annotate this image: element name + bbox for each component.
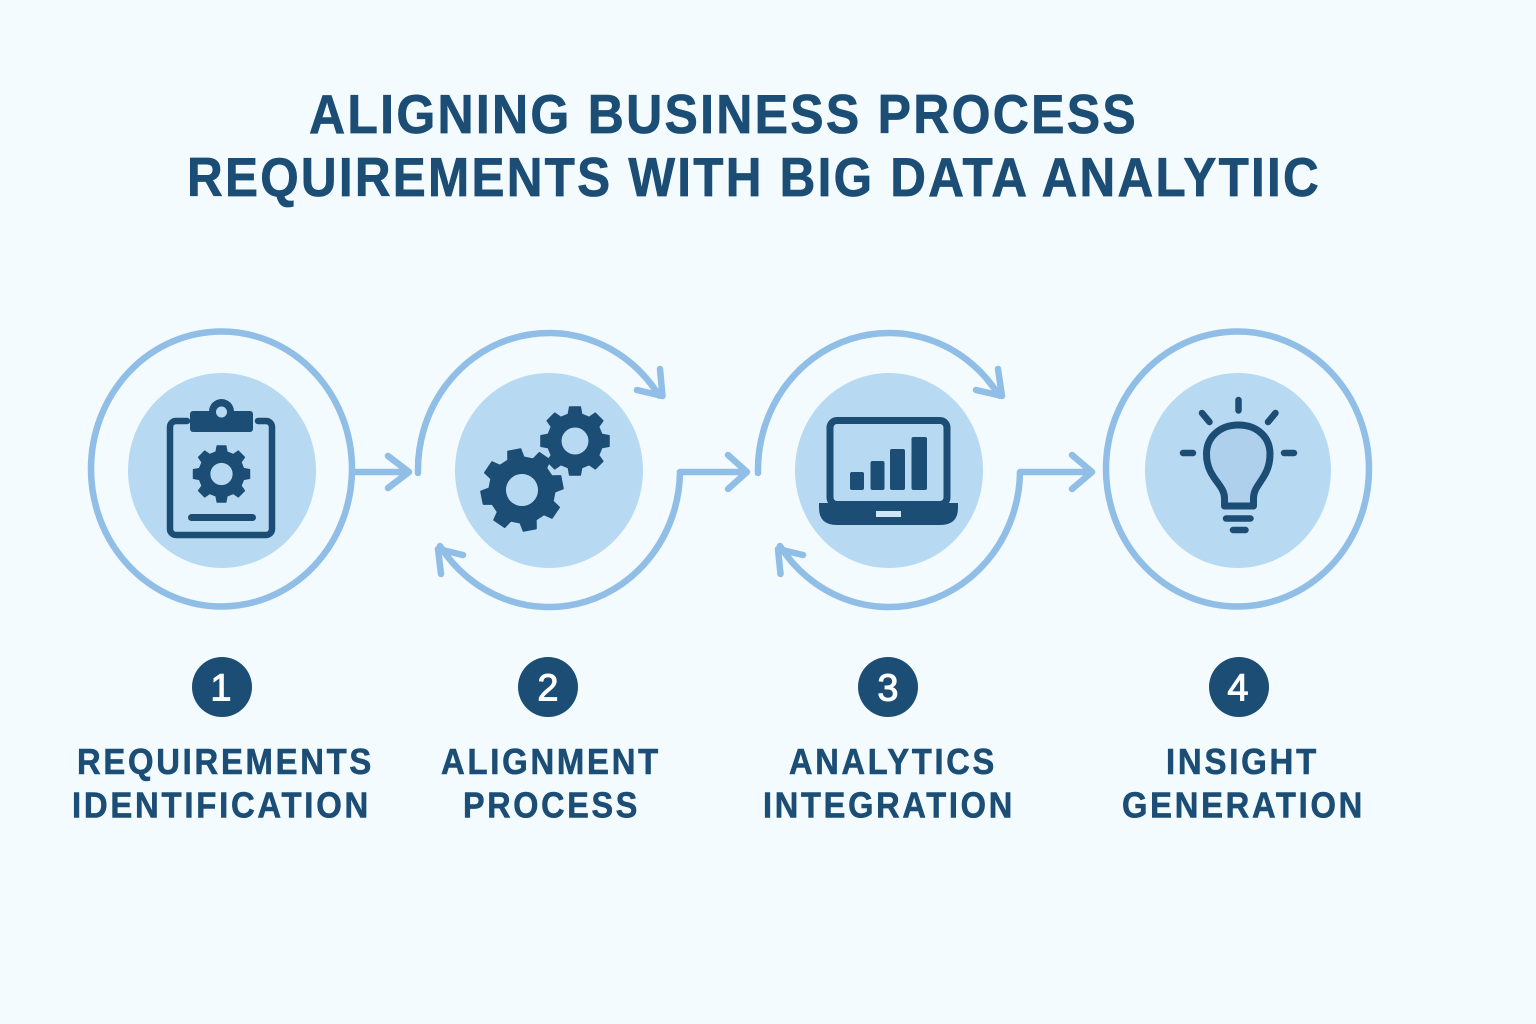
panel: step 1 requirements identification [91,332,352,606]
badge: number 2: 2 [537,668,559,710]
badge: number 1: 1 [210,668,232,710]
label: requirements identification [72,741,374,826]
arrow: cycle bottom and connector 2 [438,455,747,607]
inner disc 2 [455,373,643,568]
label: alignment process: ALIGNMENT [441,741,661,782]
icon: gears [475,407,609,537]
title: ALIGNING BUSINESS PROCESS [309,83,1138,145]
label: alignment process [441,741,661,826]
label: alignment process: PROCESS [463,784,640,826]
badge: number 4: 4 [1227,668,1249,710]
inner disc 3 [795,373,983,568]
arrow: step 1 to step 2 [356,456,409,488]
arrow: cycle bottom and connector 3 [778,455,1092,607]
label: insight generation: INSIGHT [1166,741,1319,782]
badge: number 4 [1209,657,1269,717]
arrow: cycle top 2 [418,333,662,473]
label: insight generation [1122,741,1365,826]
label: analytics integration: ANALYTICS [789,741,997,782]
label: analytics integration: INTEGRATION [763,784,1015,826]
badge: number 2 [518,657,578,717]
label: insight generation: GENERATION [1122,784,1365,826]
badge: number 3 [858,657,918,717]
badge: number 1 [192,657,252,717]
panel: step 2 alignment process [418,333,747,607]
icon: laptop with bar chart [819,420,958,525]
outer ring 4 [1106,332,1369,606]
label: requirements identification: IDENTIFICATION [72,784,371,826]
icon: light bulb [1183,400,1294,530]
inner disc 1 [128,373,316,568]
arrow: cycle top 3 [758,333,1002,473]
title [187,83,1321,208]
icon: clipboard with gear [170,399,272,535]
badge: number 3: 3 [877,668,899,710]
title: REQUIREMENTS WITH BIG DATA ANALYTIIC [187,146,1321,208]
inner disc 4 [1145,373,1331,568]
outer ring 1 [91,332,352,606]
label: requirements identification: REQUIREMENTS [77,741,374,782]
label: analytics integration [763,741,1015,826]
panel: step 3 analytics integration [758,333,1092,607]
panel: step 4 insight generation [1106,332,1369,606]
